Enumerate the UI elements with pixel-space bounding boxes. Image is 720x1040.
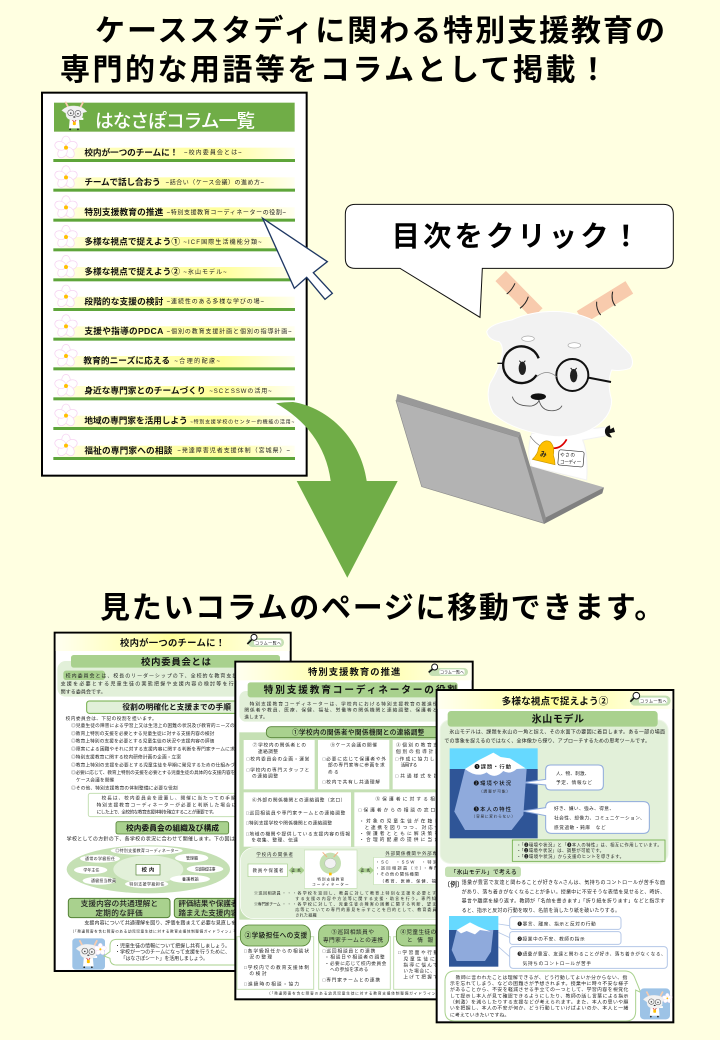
page 2 lower cards: □学校内での教育支援体制 — [244, 964, 309, 971]
page 2 lower cards: ③巡回相談員や — [331, 928, 374, 936]
page 1 role list: ◎障害による困難やそれに対する支援内容に関する判断を専門家チームに求める — [71, 745, 244, 752]
page 1 conclusion text — [71, 920, 261, 934]
page 2 lower cards: への参加を求める — [330, 966, 368, 973]
index rows: ~発達障害児者支援体制（宮城県）~ — [177, 447, 290, 455]
page 2 coordination panel: ③個別の教育支援計画や — [396, 742, 463, 749]
index header bar — [54, 102, 295, 132]
laptop user mascot and speech bubble — [345, 204, 673, 524]
panel: column index list — [42, 93, 307, 476]
page 2 coordination panel: □共通様式を提供する — [395, 773, 459, 780]
page 1 role list: ◎教育上特別の支援を必要とする児童生徒に対する支援内容の検討 — [71, 730, 215, 737]
index rows: 教育的ニーズに応える — [83, 355, 170, 366]
callout: environment: 予定、情報など — [556, 779, 592, 786]
page 1 note box: 特別支援教育コーディネーターが必要と判断した場合に開催する等） — [97, 802, 270, 809]
teacher comment bubble: （刺激）を減らしたりする支援などが考えられます。また、本人の思いや願 — [450, 999, 628, 1006]
mascot body — [529, 425, 615, 480]
speech bubble — [345, 204, 673, 317]
page 1 organization diagram: 通級担当教員 — [91, 877, 116, 883]
page 2 relationship panel: ※巡回相談員 — [254, 889, 281, 895]
teacher comment bubble — [445, 971, 641, 1021]
page 2 lower cards: 児童生徒に気付いた — [403, 956, 462, 963]
page 2 lower cards: □進級時の相談・協力 — [244, 981, 299, 988]
page 3 example text — [444, 879, 665, 914]
page 2 relationship panel: 教員や保護者 — [253, 867, 284, 874]
page 2 lower cards: ・相談日や相談者の調整 — [325, 954, 385, 961]
mascot ears — [501, 276, 629, 317]
note box — [512, 840, 665, 861]
page 1 note box: にした上で、全校的な教育支援体制を確立することが重要です。 — [97, 809, 217, 816]
page 2 intro panel: 特別支援教育コーディネーターの役割 — [264, 684, 457, 696]
page 2 lower cards: 指導に悩んでいる場合 — [403, 962, 462, 969]
page 2 relationship panel: 学校内の関係者 — [256, 851, 294, 858]
page 1 organization diagram: 特別支援学級担任 — [129, 880, 164, 886]
page 2 lower cards: □各学級担任からの相談状 — [244, 947, 309, 954]
page 1 organization text: 学校としての方針の下、各学校の状況に合わせて開催します。下の図は、 — [67, 835, 240, 842]
page 2 coordination panel: □必要に応じて保護者や外 — [323, 756, 386, 763]
page 3 mascot card — [640, 988, 673, 1019]
page 1 intro panel: 支援を必要とする児童生徒の実態把握や支援内容の検討等を行うため設置する — [61, 680, 277, 687]
page 2 coordination panel: と連携を図りつつ、対応すること — [365, 824, 458, 831]
page 1 organization diagram: ◎特別支援教育コーディネーター — [115, 847, 179, 853]
speech bubble: 目次をクリック！ — [392, 221, 640, 253]
example analysis boxes: ❶暴言、離席、指示と反対の行動 — [517, 921, 596, 928]
mascot head — [487, 311, 632, 437]
page 1 mascot card — [72, 938, 107, 970]
example analysis boxes: ❷授業中の不安、教師の指示 — [517, 935, 585, 942]
page 2 intro panel: 特別支援教育コーディネーターは、学校内における特別支援教育の推進役として — [250, 700, 455, 707]
teacher comment bubble: があることから、不安を軽減させる手立ての一つとして、学習内容を視覚化 — [450, 986, 628, 993]
teacher comment bubble: 示を忘れてしまう、などの困難さが予想されます。授業中に時々不安な様子 — [450, 980, 628, 987]
page 2 lower cards: □専門家チームとの連携 — [323, 977, 380, 984]
page 1 support boxes: 定期的な評価 — [95, 907, 143, 917]
index rows: ~校内委員会とは~ — [184, 149, 242, 157]
page 1 role list — [66, 715, 245, 791]
page 2 intro panel: 進します。 — [244, 713, 268, 720]
page 1 advice bubble — [104, 939, 263, 965]
page 3 iceberg model panel — [440, 711, 668, 863]
page 1 support boxes — [68, 898, 274, 918]
index rows: ~連続性のある多様な学びの場~ — [167, 298, 264, 306]
page 2 coordination panel: める — [328, 769, 339, 774]
page 2 coordination panel: ・対象の児童生徒が在籍している — [359, 818, 459, 825]
iceberg diagram: （調整が可能） — [479, 788, 510, 793]
page 2 title band — [236, 663, 472, 680]
page 2 coordination panel: ⑦学校内の関係者との — [253, 742, 306, 749]
page 3 title band — [438, 691, 672, 709]
page 1 role list: ケース会議を開催 — [76, 777, 115, 784]
page 2 coordination panel: □地域の機関や提供している支援内容の情報 — [246, 830, 350, 837]
index rows — [53, 136, 295, 460]
heading: move to page message: 見たいコラムのページに移動できます。 — [100, 592, 666, 625]
example analysis boxes — [498, 917, 667, 968]
page 2 lower cards: ④児童生徒の実態把握 — [400, 928, 461, 936]
page 2 lower cards — [237, 925, 465, 989]
page 2 relationship panel: 特別支援教育 — [317, 876, 344, 881]
page 1 title band — [56, 634, 290, 651]
page 1 column link: コラム一覧へ — [255, 639, 281, 645]
example analysis boxes: 気持ちのコントロールが苦手 — [523, 960, 591, 967]
page 2 coordination panel: □校内で共有し共通理解 — [323, 779, 380, 786]
mascot bell and name tag: コーディー — [560, 458, 582, 465]
page 1 title band: 校内が一つのチームに！ — [120, 637, 225, 648]
page 2 lower cards: と情報収集 — [407, 936, 454, 944]
index rows: ~特別支援学校のセンター的機能の活用~ — [190, 418, 294, 425]
page 1 support boxes: 支援内容の共通理解と — [81, 898, 158, 908]
page 2 coordination panel: ⑥外部の関係機関との連絡調整（窓口） — [252, 797, 345, 804]
page 3 example heading: 「氷山モデル」で考える — [451, 868, 517, 876]
page 2 relationship panel: ・SC ・SSW ・特別支援学校 — [375, 858, 461, 864]
example analysis boxes: ❸語彙が豊富、友達と関わることが好き、落ち着きがなくなる、 — [517, 951, 666, 958]
teacher comment bubble: して提示し本人が見て確認できるようにしたり、教師の話し言葉による指示 — [450, 992, 628, 999]
page 1 role list: ◎教育上特別の支援を必要とする児童生徒の状況や支援内容の評価 — [71, 738, 215, 745]
index rows: ~特別支援教育コーディネーターの役割~ — [167, 208, 286, 216]
page 2 coordination panel: ①学校内の関係者や関係機関との連絡調整 — [292, 727, 425, 736]
page 1 support boxes: 踏まえた支援内容の見直し — [178, 907, 268, 917]
page 2 coordination panel: □保護者からの相談の窓口の役割 — [359, 807, 456, 814]
page 1 note box: 校長は、校内委員会を設置し、開催に当たっての手順（定期的に開催 — [102, 795, 275, 802]
page 2 coordination panel: □巡回相談員や専門家チームとの連絡調整 — [246, 809, 346, 816]
iceberg diagram: （容易に変わらない） — [472, 814, 515, 819]
page 3 example heading — [445, 867, 521, 877]
panel: page 1 校内委員会 — [55, 633, 291, 971]
index rows: ~氷山モデル~ — [183, 268, 227, 276]
page 2 coordination panel: 活用する — [401, 762, 417, 769]
title: top heading — [60, 14, 665, 87]
page 3 example text: 語彙が豊富で友達と関わることが好きなAさんは、気持ちのコントロールが苦手な面 — [462, 879, 665, 886]
page 2 lower cards: 上げて把握できる体制 — [403, 974, 462, 981]
page 1 organization heading — [116, 822, 229, 834]
index rows: ~合理的配慮~ — [174, 357, 220, 365]
page 2 coordination panel: ⑤保護者に対する相談窓口 — [375, 796, 456, 803]
page 1 column link — [247, 634, 284, 647]
iceberg diagram: ❶課題・行動 — [474, 762, 512, 770]
page 2 lower cards: いた場合に、校内委員会 — [403, 968, 462, 975]
page 3 iceberg model panel: 氷山モデル — [532, 713, 584, 726]
iceberg diagram — [450, 748, 538, 838]
page 2 lower cards: □学習面や行動面で支援 — [398, 949, 463, 956]
page 1 organization diagram: 校内 — [142, 866, 154, 874]
page 2 lower cards: □巡回相談員との連携 — [323, 948, 376, 955]
index rows: チームで話し合おう — [84, 176, 161, 187]
index rows: 支援や指導のPDCA — [84, 325, 164, 336]
page 2 coordination panel: 個別の指導計画の作成 — [396, 748, 460, 755]
page 3 iceberg model panel: 氷山モデルは、課題を氷山の一角と捉え、その水面下の要因に着目します。ある一部の場面 — [449, 728, 665, 735]
page 1 role heading — [87, 701, 280, 713]
page 2 coordination panel: ・合理的配慮の提供に当たる相談 — [359, 836, 460, 843]
page 1 advice bubble: ・学校が一つのチームになって支援を行うために、 — [115, 949, 230, 956]
page 2 relationship panel — [240, 848, 466, 919]
page 3 example text: 暴言や離席を繰り返す。教師が「名前を書きます」「折り紙を折ります」などと指示す — [462, 898, 665, 905]
page 1 support boxes: 評価結果や保護者の意見を — [178, 898, 268, 908]
page 1 intro panel — [57, 655, 281, 697]
icon: mouse cursor arrow — [263, 218, 332, 299]
page 2 relationship panel: する支援の内容や方法等に関する支援・助言を行う。専門知識を有する — [295, 895, 462, 901]
page 2 column link: コラム一覧へ — [440, 669, 464, 675]
page 1 role list: ◎必要に応じて、教育上特別の支援を必要とする児童生徒の具体的な支援内容を検討 — [71, 769, 245, 776]
teacher comment bubble: いを把握し、本人の不安が何か、どう行動していけばよいのか、本人と一緒 — [450, 1005, 628, 1012]
page 1 conclusion text: 支援内容について共通理解を図り、評価を踏まえて必要な見直しを行います。 — [84, 920, 261, 927]
page 2 lower cards: ②学級担任への支援 — [245, 931, 308, 940]
callout: personal traits: 感覚過敏・鈍麻 など — [554, 824, 606, 831]
page 3 example text: 〔例〕 — [444, 879, 464, 888]
page 1 advice bubble: 「はなさぽシート」を活用しましょう。 — [121, 955, 208, 962]
page 2 relationship panel: コーディネーター — [312, 882, 349, 887]
page 2 relationship panel: ※専門家チーム — [254, 901, 281, 907]
page 2 column link — [429, 664, 468, 676]
iceberg diagram: ❸本人の特性 — [474, 805, 512, 813]
page 2 relationship panel: ・・・各学校を巡回し、教員に対して教育上特別な支援を必要とする児童生徒 — [282, 889, 462, 895]
teacher comment bubble: に考えていきたいですね。 — [450, 1011, 509, 1018]
title: top heading: 専門的な用語等をコラムとして掲載！ — [60, 54, 608, 87]
page 2 relationship panel: 連携 — [361, 868, 371, 873]
page 2 lower cards: の検討 — [249, 970, 267, 977]
index header bar: はなさぽコラム一覧 — [95, 110, 255, 131]
page 2 intro panel: 関係者や教員、医療、保健、福祉、労働等の関係機関と連絡調整、保護者との関係 — [244, 706, 455, 713]
page 3 title band: 多様な視点で捉えよう② — [502, 695, 609, 707]
page 2 coordination panel: □校内委員会の企画・運営 — [247, 756, 310, 763]
index rows: 校内が一つのチームに！ — [84, 146, 178, 157]
page 1 organization diagram: 養護教諭 — [182, 875, 199, 881]
page 2 coordination panel: の連絡調整 — [252, 773, 278, 780]
page 3 example text: ると、指示と反対の行動を取り、名前を消したり紙を破いたりする。 — [462, 907, 620, 914]
page 2 intro panel — [239, 682, 466, 722]
page 3 column link — [630, 692, 671, 706]
page 2 lower cards: 専門家チームとの連携 — [323, 936, 383, 944]
callout: personal traits: 好き、嫌い、強み、得意、 — [554, 805, 614, 812]
page 2 coordination panel: ⑨ケース会議の開催 — [330, 742, 377, 749]
teacher comment bubble: 教師に言われたことは理解できるが、どう行動してよいか分からない、指 — [456, 974, 627, 981]
page 2 coordination panel: ・保護者とともに解決策を考える — [359, 830, 459, 837]
page 2 coordination panel: □学校内の専門スタッフと — [247, 766, 309, 773]
page 2 lower cards: ・必要に応じて校内委員会 — [325, 960, 387, 967]
callout: environment: 人、物、刺激、 — [556, 770, 589, 777]
index rows: ~SCとSSWの活用~ — [209, 387, 272, 395]
page 1 organization diagram: 管理職 — [186, 854, 198, 860]
page 2 relationship panel: ・その他の関係機関 — [375, 871, 419, 877]
page 1 organization diagram: 生徒指導主事 — [195, 865, 216, 871]
note box: ・「❷環境や状況」と「❸本人の特性」は、相互に作用しています。 — [517, 841, 662, 848]
page 1 intro panel: 校内委員会とは — [141, 656, 211, 667]
mascot bell and name tag: やさの — [560, 452, 575, 459]
index rows: 身近な専門家とのチームづくり — [84, 385, 206, 396]
page 1 role list: ◎特別支援教育に関する校内研修計画の企画・立案 — [71, 754, 181, 761]
page 2 relationship panel: ・・・各学校に対して、児童生徒の障害の困難に関する判断、望ましい教育的 — [282, 901, 462, 907]
small iceberg — [449, 916, 498, 967]
note box: ・「❷環境や状況」から支援のヒントを導きます。 — [517, 853, 624, 860]
page 2 coordination panel — [239, 727, 466, 920]
index rows: 特別支援教育の推進 — [84, 206, 164, 217]
page 2 footnote: （「発達障害を含む障害のある幼児児童生徒に対する教育支援体制整備ガイドライン」平成29年） — [267, 990, 464, 995]
title: top heading: ケーススタディに関わる特別支援教育の — [95, 14, 665, 48]
page 2 relationship panel: （教育、医療、保健、福祉、労働） — [380, 877, 462, 883]
page 2 relationship panel: 連携 — [291, 868, 301, 873]
page 2 relationship panel: 応等についての専門的意見を示すことを目的として、教育委員会等に設置 — [295, 906, 462, 912]
page 1 role heading: 役割の明確化と支援までの手順 — [122, 702, 231, 712]
page 2 title band: 特別支援教育の推進 — [308, 666, 401, 677]
page 1 note box — [88, 793, 278, 817]
index rows: 多様な視点で捉えよう① — [84, 236, 180, 247]
mascot glasses — [497, 346, 611, 391]
page 2 coordination panel: 部の専門家等に参画を求 — [328, 762, 385, 769]
page 1 intro panel: 校内委員会とは、校長のリーダーシップの下、全校的な教育支援体制を確立し、 — [66, 672, 279, 679]
note box: ・「❷環境や状況」は、調整が可能です。 — [517, 847, 604, 854]
index rows: 地域の専門家を活用しよう — [84, 414, 188, 425]
page 2 relationship panel: 外部関係機関や外部専門 — [385, 850, 442, 857]
laptop — [396, 394, 604, 524]
page 2 role cards — [244, 740, 464, 847]
page 1 intro panel: 関する委員会です。 — [61, 688, 106, 695]
iceberg diagram: ❷環境や状況 — [474, 779, 512, 787]
page 1 advice bubble: ・児童生徒の情報について把握し共有しましょう。 — [115, 942, 230, 949]
index rows: ~ICF国際生活機能分類~ — [183, 238, 262, 246]
page 2 relationship panel: ・巡回相談員（※）・専門家チーム — [375, 864, 460, 870]
page 3 column link: コラム一覧へ — [640, 697, 667, 703]
page 3 iceberg model panel: での事象を捉えるのではなく、全体像から探り、アプローチするための思考ツールです。 — [444, 738, 650, 745]
index rows: ~個別の教育支援計画と個別の指導計画~ — [167, 327, 292, 335]
panel: page 3 氷山モデル — [437, 690, 673, 1022]
arrow: big green curved arrow — [276, 402, 398, 578]
page 3 example text: があり、落ち着きがなくなることが多い。授業中に不安そうな表情を見せると、時折、 — [462, 888, 665, 895]
index rows: 段階的な支援の検討 — [84, 295, 164, 306]
page 2 coordination panel: を収集、整理、伝達 — [251, 837, 298, 844]
page 2 coordination panel: 連絡調整 — [258, 748, 278, 755]
callout: personal traits — [522, 802, 649, 833]
panel: page 2 特別支援教育コーディネーター — [235, 662, 473, 999]
mascot bell and name tag — [530, 436, 584, 467]
index rows: 多様な視点で捉えよう② — [84, 266, 180, 277]
page 1 organization heading: 校内委員会の組織及び構成 — [126, 823, 219, 833]
page 1 role list: ◎児童生徒の障害による学習上又は生活上の困難の状況及び教育的ニーズの把握 — [71, 722, 245, 729]
page 2 coordination panel: □特別支援学校や関係機関との連絡調整 — [246, 820, 332, 827]
page 2 lower cards: 況の整理 — [249, 953, 272, 960]
index rows: ~話合い（ケース会議）の進め方~ — [166, 178, 264, 186]
mascot bell and name tag: み — [540, 451, 547, 459]
page 1 role list: ◎教育上特別の支援を必要とする児童生徒を早期に発見するための仕組みづくり — [71, 761, 244, 768]
page 1 organization diagram: 学年主任 — [83, 866, 99, 872]
page 1 organization diagram: 通常の学級担任 — [85, 855, 115, 861]
callout: personal traits: 社会性、想像力、コミュニケーション、 — [554, 814, 645, 821]
page 1 conclusion text: （「発達障害を含む障害のある幼児児童生徒に対する教育支援体制整備ガイドライン」平成29年3月 — [71, 929, 257, 934]
page 1 role list: 校内委員会は、下記の役割を担います。 — [66, 715, 157, 722]
page 1 organization diagram — [67, 845, 230, 893]
page 1 role list: ◎その他、特別支援教育の体制整備に必要な役割 — [71, 784, 178, 791]
callout: environment — [522, 765, 603, 790]
page 2 relationship panel: された組織 — [295, 912, 317, 918]
index rows: 福祉の専門家への相談 — [84, 444, 173, 455]
page 2 coordination panel: □作成に協力し、共通に — [395, 756, 459, 763]
